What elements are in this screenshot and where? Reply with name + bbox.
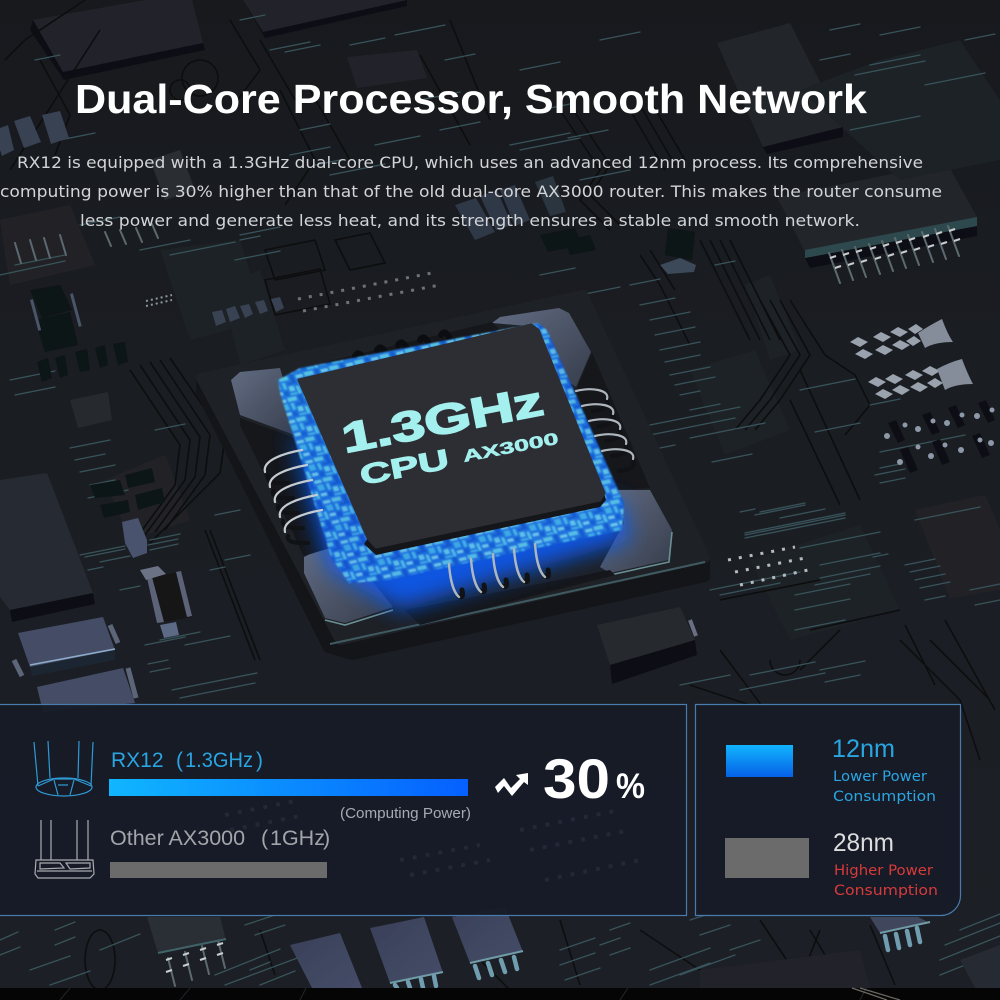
chip illustration: [201, 295, 705, 655]
text: higher power: Higher Power: [834, 863, 933, 879]
body text: RX12 is equipped with a 1.3GHz dual-core CPU, which uses an advanced 12nm process. Its comprehensive: [17, 153, 923, 172]
chip label: AX3000: AX3000: [461, 430, 560, 466]
text: lower power: Consumption: [833, 789, 936, 805]
stat: 30 percent: %: [616, 767, 645, 806]
bottom heat-sink chips: [290, 933, 362, 988]
chip label: 1.3GHz: 1.3GHz: [338, 377, 547, 462]
label: RX12: (: [176, 749, 183, 772]
label: other AX3000: Other AX3000: [110, 826, 245, 850]
text: lower power: Lower Power: [833, 769, 927, 785]
faint panel details: [225, 800, 640, 880]
panel: computing power comparison: [0, 704, 686, 916]
right coils: [576, 389, 634, 471]
label: other AX3000: ): [323, 826, 330, 850]
board components top-left: capacitors: [0, 111, 696, 326]
label: 12nm: 12nm: [832, 735, 895, 763]
label: RX12: ): [256, 749, 263, 772]
label: other AX3000: 1GHz: [270, 826, 325, 850]
body text: computing power is 30% higher than that of the old dual-core AX3000 router. This makes the router consume: [0, 182, 942, 201]
title: Dual-Core Processor, Smooth Network: [75, 76, 867, 122]
text: higher power: Consumption: [834, 883, 938, 899]
large dark chips: [0, 0, 1000, 665]
glowing substrate: [278, 323, 624, 583]
SMD bits: [14, 228, 696, 712]
icon: other router: [35, 820, 94, 878]
bottom black band: [0, 988, 1000, 1000]
body text: [0, 153, 942, 230]
small black transistors left: [37, 228, 596, 518]
board pins: [15, 224, 959, 986]
dark cross arms: [240, 322, 650, 625]
base plate: [201, 295, 705, 655]
silver diamond pads right: [850, 319, 973, 399]
icon: RX12 router: [34, 741, 93, 796]
chip label: CPU: CPU: [357, 443, 452, 491]
dark chip sides: [10, 0, 977, 684]
plate edge highlights: [325, 532, 672, 625]
body text: less power and generate less heat, and its strength ensures a stable and smooth network.: [80, 211, 860, 230]
top pins: [355, 332, 449, 358]
white pin ticks: [166, 229, 960, 972]
label: RX12: 1.3GHz: [185, 749, 253, 772]
label: other AX3000: (: [261, 826, 269, 850]
stat: 30 percent: [543, 747, 645, 810]
dotted pads: [146, 272, 808, 585]
chip top: [299, 325, 604, 547]
bar: other: [110, 862, 327, 878]
black parts with dots right: [888, 400, 995, 473]
text: lower power: [833, 769, 936, 805]
label: RX12: RX12: [111, 749, 164, 772]
icon: up trend arrow: [495, 773, 528, 796]
stat: 30 percent: 30: [543, 747, 610, 810]
label: 28nm: 28nm: [833, 829, 894, 857]
left coils: [265, 450, 322, 543]
panel: process node: [696, 704, 961, 916]
chip side: [364, 493, 606, 555]
glow halo: [290, 430, 630, 610]
note: computing power: (Computing Power): [340, 805, 471, 822]
text: higher power: [834, 863, 938, 899]
bottom coils: [449, 544, 549, 597]
swatch: 12nm: [726, 745, 793, 777]
swatch: 28nm: [725, 838, 809, 878]
silver corner plates: [231, 308, 672, 623]
bar: RX12: [109, 779, 468, 796]
teal chip edge: [805, 217, 977, 258]
